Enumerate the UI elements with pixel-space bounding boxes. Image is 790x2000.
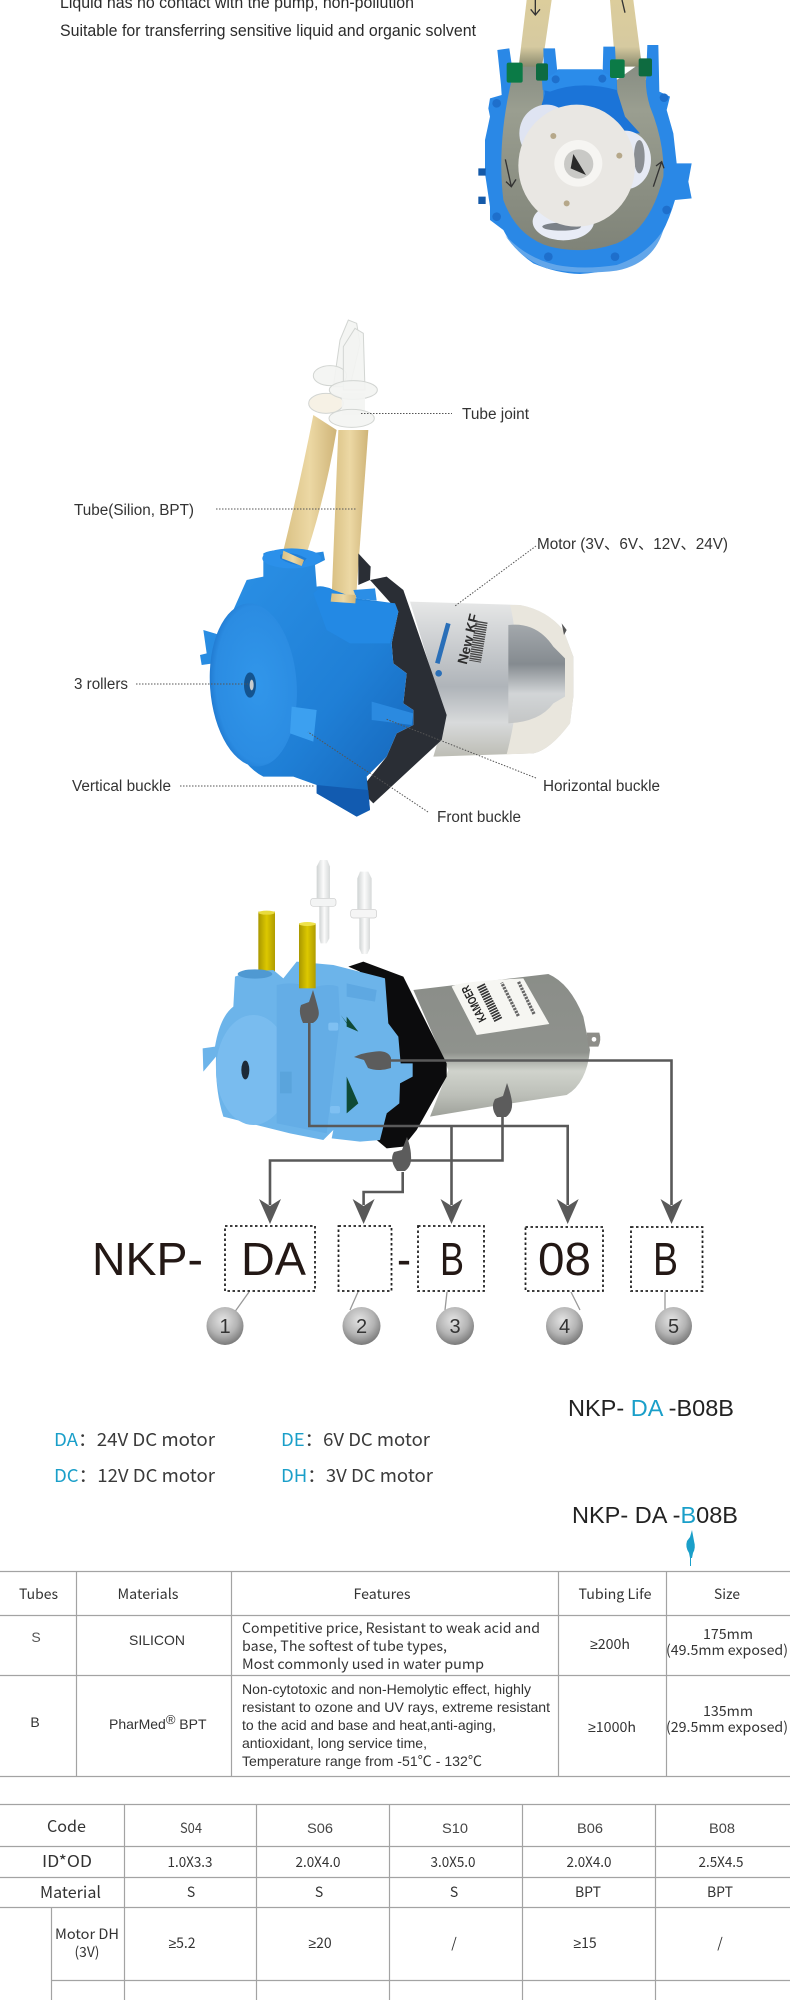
- sub: material row: S: [187, 1882, 195, 1902]
- sub: pump photo: [200, 320, 573, 817]
- sub: row labels: (3V): [74, 1942, 100, 1962]
- sub: callout labels: 3 rollers: [74, 676, 128, 693]
- sub: ID*OD row: 2.0X4.0: [566, 1852, 612, 1872]
- sub: numbered balls: 4: [559, 1316, 570, 1338]
- sub: numbered balls: [206, 1292, 692, 1345]
- sub: pharmed row: B: [30, 1714, 40, 1730]
- sub: silicon row: 175mm: [703, 1624, 753, 1644]
- sub: header row: [19, 1584, 740, 1604]
- sub: motor DH row: ≥5.2: [168, 1933, 196, 1953]
- sub: ID*OD row: 2.0X4.0: [296, 1852, 341, 1872]
- sub: pharmed row: to the acid and base and heat,anti-aging,: [242, 1717, 496, 1733]
- sub: numbered balls: 3: [449, 1316, 461, 1338]
- sub: motor DH row: /: [451, 1933, 457, 1953]
- legend: motor voltage codes: DH：3V DC motor: [281, 1462, 434, 1488]
- sub: numbered balls: 5: [668, 1316, 679, 1338]
- motor label marks: [435, 612, 482, 677]
- sub: rendered pump: [203, 860, 600, 1148]
- sub: model code letters: 08: [538, 1233, 591, 1285]
- sub: model code letters: NKP-: [92, 1233, 203, 1285]
- sub: ID*OD row: [168, 1852, 744, 1872]
- sub: grey tube bed: [501, 63, 663, 250]
- heading: tube code example: NKP- DA -B08B: [572, 1502, 738, 1528]
- sub: model code letters: DA: [241, 1233, 306, 1285]
- sub: silicon row: (49.5mm exposed): [666, 1640, 788, 1660]
- sub: header row: Features: [354, 1584, 411, 1604]
- diagram: model code breakdown: [92, 860, 702, 1345]
- sub: rendered pump: KAMOER: [458, 983, 489, 1024]
- table: tube specifications: [0, 1804, 790, 2000]
- sub: motor DH row: [168, 1933, 723, 1953]
- sub: callout labels: Motor (3V、6V、12V、24V): [537, 536, 728, 553]
- sub: pharmed row: resistant to ozone and UV rays, extreme resistant: [242, 1699, 550, 1715]
- sub: pharmed row: 135mm: [703, 1701, 753, 1721]
- sub: row labels: [40, 1813, 119, 1962]
- sub: ID*OD row: 2.5X4.5: [698, 1852, 744, 1872]
- sub: material row: [187, 1882, 733, 1902]
- sub: numbered balls: 2: [356, 1316, 367, 1338]
- sub: material row: BPT: [707, 1882, 733, 1902]
- sub: callout labels: Horizontal buckle: [543, 778, 660, 795]
- sub: white rotor disc: [518, 105, 635, 227]
- text block: tubing benefits: [60, 0, 476, 40]
- sub: pharmed row: BPT: [175, 1716, 207, 1732]
- sub: pharmed row: [30, 1681, 788, 1769]
- sub: blue housing: [485, 45, 692, 274]
- sub: rollers: [533, 203, 594, 240]
- sub: material row: S: [450, 1882, 458, 1902]
- image: assembled pump with callouts: [72, 320, 728, 826]
- sub: code row: S06: [307, 1820, 333, 1836]
- sub: model code letters: B: [440, 1233, 464, 1285]
- sub: ID*OD row: 1.0X3.3: [168, 1852, 212, 1872]
- blue pump head: [203, 962, 413, 1142]
- sub: tubes: [519, 0, 552, 67]
- sub: model code letters: [92, 1233, 678, 1285]
- motor: [413, 974, 590, 1117]
- legend: motor voltage codes: [54, 1426, 434, 1488]
- sub: row labels: Motor DH: [55, 1924, 119, 1944]
- sub: material row: S: [315, 1882, 323, 1902]
- blue pump head: [200, 550, 413, 817]
- sub: callout labels: Tube joint: [462, 406, 530, 423]
- sub: silicon row: base, The softest of tube types,: [242, 1636, 447, 1656]
- sub: header row: Size: [714, 1584, 740, 1604]
- sub: model code letters: -: [397, 1233, 411, 1285]
- sub: callout labels: [72, 406, 728, 826]
- sub: pharmed row: antioxidant, long service time,: [242, 1735, 427, 1751]
- text block: tubing benefits: Suitable for transferring sensitive liquid and organic solvent: [60, 22, 476, 40]
- sub: pharmed row: PharMed: [109, 1716, 166, 1732]
- sub: silicon row: [31, 1618, 788, 1674]
- sub: pharmed row: (29.5mm exposed): [666, 1717, 788, 1737]
- sub: pharmed row: ≥1000h: [588, 1717, 636, 1737]
- sub: code row: S10: [442, 1820, 468, 1836]
- sub: numbered balls: 1: [219, 1316, 231, 1338]
- sub: pointing hands: [300, 990, 512, 1171]
- motor body: [410, 602, 573, 757]
- sub: row labels: ID*OD: [42, 1848, 92, 1872]
- sub: silicon row: Competitive price, Resistant to weak acid and: [242, 1618, 540, 1638]
- sub: row labels: Code: [47, 1813, 86, 1837]
- legend: motor voltage codes: DA：24V DC motor: [54, 1426, 216, 1452]
- legend: motor voltage codes: DE：6V DC motor: [281, 1426, 431, 1452]
- sub: header row: Tubing Life: [578, 1584, 652, 1604]
- sub: code row: [180, 1818, 735, 1838]
- sub: ID*OD row: 3.0X5.0: [430, 1852, 476, 1872]
- sub: pharmed row: Temperature range from -51℃ - 132℃: [242, 1753, 482, 1769]
- sub: code row: S04: [180, 1818, 202, 1838]
- sub: model code letters: B: [653, 1233, 678, 1285]
- legend: motor voltage codes: DC：12V DC motor: [54, 1462, 216, 1488]
- sub: callout labels: Front buckle: [437, 809, 521, 826]
- sub: silicon row: Most commonly used in water pump: [242, 1654, 484, 1674]
- sub: silicon row: ≥200h: [590, 1634, 630, 1654]
- image: open pump head with rollers: [478, 0, 692, 274]
- sub: arrowheads: [259, 1199, 682, 1224]
- sub: pharmed row: Non-cytotoxic and non-Hemolytic effect, highly: [242, 1681, 531, 1697]
- sub: material row: BPT: [575, 1882, 601, 1902]
- sub: central block: [533, 69, 640, 133]
- motor label marks: New KF: [454, 612, 482, 666]
- sub: code row: B08: [709, 1820, 735, 1836]
- sub: pharmed row: ®: [166, 1712, 176, 1727]
- table: tube materials: [0, 1572, 790, 1776]
- black plate: [340, 962, 447, 1148]
- sub: dashed code boxes: [225, 1226, 702, 1291]
- sub: callout labels: Tube(Silion, BPT): [74, 502, 194, 519]
- sub: motor DH row: /: [717, 1933, 723, 1953]
- sub: header row: Tubes: [19, 1584, 58, 1604]
- sub: motor DH row: ≥20: [308, 1933, 332, 1953]
- sub: silicon row: S: [31, 1629, 41, 1645]
- sub: callout labels: Vertical buckle: [72, 778, 171, 795]
- sub: callout dotted leaders: [136, 414, 536, 812]
- sub: header row: Materials: [118, 1584, 179, 1604]
- motor label: [452, 978, 549, 1035]
- icon: pointing hand: [686, 1530, 695, 1566]
- sub: motor DH row: ≥15: [573, 1933, 597, 1953]
- heading: motor code example: NKP- DA -B08B: [568, 1395, 734, 1421]
- sub: silicon row: SILICON: [129, 1632, 185, 1648]
- black plate: [358, 553, 371, 585]
- sub: code row: B06: [577, 1820, 603, 1836]
- sub: green clips: [507, 58, 652, 83]
- sub: row labels: Material: [40, 1879, 101, 1903]
- sub: connector lines: [270, 1023, 672, 1205]
